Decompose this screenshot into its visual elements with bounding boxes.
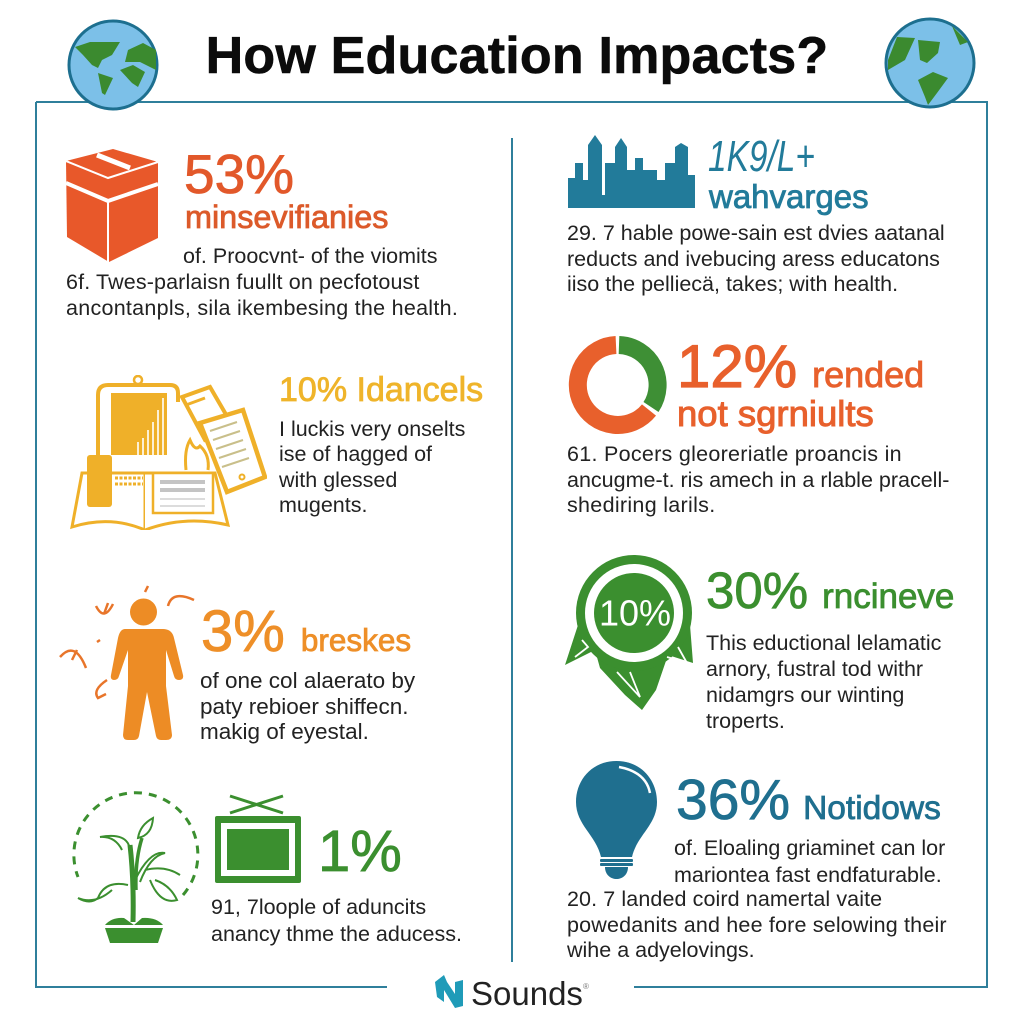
body text xyxy=(674,836,945,886)
body text: anancy thme the aducess. xyxy=(211,922,462,946)
body text: iiso the pelliecä, takes; with health. xyxy=(567,272,898,296)
body text: of one col alaerato by xyxy=(200,668,415,693)
body text: ise of hagged of xyxy=(279,442,432,466)
panel: donut 12 percent xyxy=(567,333,949,517)
body text: 6f. Twes-parlaisn fuullt on pecfotoust xyxy=(66,270,420,294)
body text: paty rebioer shiffecn. xyxy=(200,694,408,718)
body text: 91, 7loople of aduncits xyxy=(211,895,426,919)
stat: 3% breskes: 3% breskes xyxy=(201,599,411,664)
panel: 10 percent xyxy=(70,371,483,530)
stat: 1%: 1% xyxy=(318,819,402,884)
body text: mariontea fast endfaturable. xyxy=(674,862,942,886)
body text: I luckis very onselts xyxy=(279,417,465,441)
icon: N logo xyxy=(435,975,463,1008)
stat label: minsevifianies xyxy=(185,199,388,235)
stat label: not sgrniults xyxy=(677,393,874,434)
body text xyxy=(66,244,458,320)
body text xyxy=(567,442,949,517)
title: How Education Impacts? xyxy=(206,27,828,85)
body text: 61. Pocers gleoreriatle proancis in xyxy=(567,442,902,466)
body text xyxy=(200,668,415,744)
panel: lightbulb 36 percent xyxy=(567,761,947,962)
body text: 29. 7 hable powe-sain est dvies aatanal xyxy=(567,221,945,245)
icon: green TV xyxy=(215,794,301,883)
body text: with glessed xyxy=(279,468,397,492)
icon: right globe xyxy=(884,18,976,108)
stat: 10% Idancels: 10% Idancels xyxy=(279,371,483,409)
panel: 53 percent xyxy=(66,143,458,320)
body text continued: 20. 7 landed coird namertal vaite xyxy=(567,887,882,911)
body text: ancugme-t. ris amech in a rlable pracell- xyxy=(567,468,949,492)
body text: mugents. xyxy=(279,493,367,517)
footer logo xyxy=(435,975,589,1012)
stat: 53%: 53% xyxy=(184,143,294,205)
icon: green badge: 10% xyxy=(599,592,671,634)
stat label: wahvarges xyxy=(709,178,869,215)
stat: 30% rncineve: 30% rncineve xyxy=(706,562,954,619)
body text continued xyxy=(567,887,947,962)
body text: arnory, fustral tod withr xyxy=(706,657,923,681)
stat: 12% rended: 12% rended xyxy=(677,333,924,400)
body text: shediring larils. xyxy=(567,493,716,517)
body text: makig of eyestal. xyxy=(200,719,369,744)
body text xyxy=(706,631,941,733)
panel: 1 percent xyxy=(72,791,462,946)
body text: of. Eloaling griaminet can lor xyxy=(674,836,945,860)
icon: blue city skyline xyxy=(568,135,695,208)
icon: left globe xyxy=(68,20,158,110)
body text: This eductional lelamatic xyxy=(706,631,941,655)
icon: plant in dashed circle xyxy=(72,791,200,943)
icon: blue light bulb xyxy=(576,761,657,879)
body text xyxy=(567,221,945,296)
body text: troperts. xyxy=(706,709,785,733)
panel: skyline stat xyxy=(567,132,945,296)
body text: ancontanpls, sila ikembesing the health. xyxy=(66,296,458,320)
brand name: Sounds® xyxy=(471,975,589,1012)
body text: nidamgrs our winting xyxy=(706,683,904,707)
icon: green badge xyxy=(565,555,693,710)
icon: yellow devices xyxy=(70,375,267,530)
body text continued: powedanits and hee fore selowing their xyxy=(567,912,947,936)
panel: badge 30 percent xyxy=(565,555,954,733)
body text xyxy=(211,895,462,946)
body text: reducts and ivebucing aress educatons xyxy=(567,246,940,270)
body text: of. Proocvnt- of the viomits xyxy=(183,244,438,268)
icon: orange box xyxy=(66,149,158,262)
stat: garbled figure: 1K9/L+ xyxy=(708,132,815,181)
body text xyxy=(279,417,465,517)
icon: orange person xyxy=(59,586,194,740)
chart: donut xyxy=(568,336,667,434)
panel: 3 percent xyxy=(59,586,415,744)
body text continued: wihe a adyelovings. xyxy=(567,938,755,962)
stat: 36% Notidows: 36% Notidows xyxy=(676,768,941,832)
